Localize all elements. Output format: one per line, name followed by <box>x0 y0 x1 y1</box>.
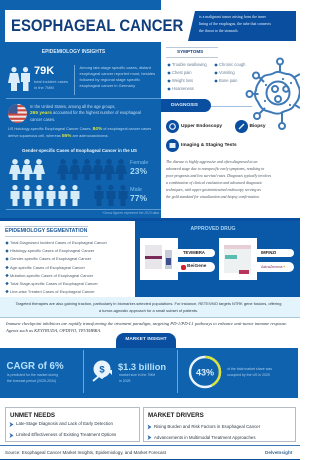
source text: Source: Esophageal Cancer Market Insights, Epidemiology, and Market Forecast <box>5 450 166 455</box>
caption: CAGR: the forecast period (2025-2034) <box>7 379 56 383</box>
text block: diagnosis description: The disease is highly aggressive and often diagnosed at an <box>166 160 257 164</box>
panel: epidemiology segmentation <box>0 221 135 297</box>
definition text: lining of the esophagus, the tube that connects <box>199 22 271 26</box>
pictogram: male 77% <box>10 185 128 206</box>
caption: 79K: in the 7MM <box>34 85 54 90</box>
icon: two people <box>8 67 30 91</box>
panel: market drivers <box>143 407 296 442</box>
caption: 43% <box>227 367 272 377</box>
symptoms list: Weight loss <box>172 78 193 83</box>
text block: among late-stage cases: esophageal cancer in Germany <box>80 83 135 88</box>
heading: diagnosis <box>161 99 211 112</box>
icon: imaging <box>166 139 179 152</box>
title box <box>5 10 186 42</box>
band: blue divider <box>0 218 300 221</box>
callout: targeted therapies: a tumor-agnostic approach for a small subset of patients. <box>99 308 198 312</box>
text block: diagnosis description <box>166 160 271 199</box>
list: unmet needs: Late-Stage Diagnosis and Lack of Early Detection <box>16 421 113 426</box>
callout: targeted therapies <box>0 297 300 318</box>
heading: epidemiology insights: EPIDEMIOLOGY INSIGHTS <box>42 49 105 55</box>
title: ESOPHAGEAL CANCER <box>11 16 183 35</box>
symptoms list: Bone pain <box>219 78 237 83</box>
segmentation list: Total Stage-specific Cases of Esophageal Cancer <box>10 280 98 286</box>
panel: market insight <box>0 348 298 398</box>
label: female 23%: 23% <box>130 166 147 176</box>
drug logo: AstraZeneca <box>257 262 294 272</box>
text block: immune checkpoint inhibitors: Immune checkpoint inhibitors are rapidly transforming the treatment paradigm, targeting PD-1/PD-L1 pathways to enhance anti-tumor immune response. <box>6 321 287 326</box>
donut chart: 43%: 43% <box>196 368 214 378</box>
label: female 23%: Female <box>130 160 148 166</box>
caption: 43%: occupied by the US in 2025 <box>227 373 270 377</box>
icon: US flag <box>8 104 27 123</box>
logo: DelveInsight: DelveInsight <box>265 450 292 454</box>
segmentation list: Total Diagnosed Incident Cases of Esophageal Cancer <box>10 240 107 245</box>
list: market drivers: Rising Burden and Risk Factors in Esophageal Cancer <box>154 424 260 429</box>
heading: approved drug: APPROVED DRUG <box>190 226 236 232</box>
text block: diagnosis description: a combination of clinical evaluation and advanced diagnostic <box>166 181 262 185</box>
text block: among late-stage cases: followed by regional stage specific <box>80 77 140 82</box>
icon: cancer cell <box>246 58 300 130</box>
list: unmet needs: Limited Effectiveness of Existing Treatment Options <box>16 432 116 437</box>
segmentation list <box>5 240 107 294</box>
drug label: IMFINZI <box>257 249 294 257</box>
symptoms list <box>168 62 246 91</box>
pictogram: female 23% <box>9 159 127 180</box>
label: male 77%: Male <box>130 187 142 193</box>
drug label: TEVIMBRA <box>178 249 215 257</box>
text block: US age groups: cancer cases. <box>30 117 55 122</box>
heading: unmet needs: UNMET NEEDS <box>10 412 55 418</box>
text block: diagnosis description: the gold standard for visualization and biopsy confirmation. <box>166 195 260 199</box>
text block: US age groups: 265 years accounted for the highest number of esophageal <box>30 110 141 116</box>
drug label: IMFINZI: IMFINZI <box>261 250 276 255</box>
text block: among late-stage cases: Among late-stage specific cases, distant <box>80 65 151 70</box>
caption: CAGR <box>7 373 58 383</box>
segmentation list: Age-specific Cases of Esophageal Cancer <box>10 264 85 270</box>
heading: market drivers: MARKET DRIVERS <box>148 412 204 418</box>
text block: histology: US histology-specific Esophageal Cancer Cases, 84% of esophageal cancer cases <box>8 127 151 132</box>
caption: 79K: total incident cases <box>34 79 68 84</box>
segmentation list: Gender-specific Cases of Esophageal Cancer <box>10 256 91 261</box>
heading: market insight: MARKET INSIGHT <box>125 337 167 342</box>
symptoms list: Hoarseness <box>172 86 194 91</box>
heading: diagnosis: DIAGNOSIS <box>171 103 198 108</box>
text block: diagnosis description: poor prognosis and low survival rates. Diagnosis typically involves <box>166 174 271 178</box>
product image: Imfinzi <box>219 238 257 280</box>
text block: US age groups <box>30 104 141 122</box>
text block: histology: derive squamous cell, whereas 55% are adenocarcinoma. <box>8 134 109 139</box>
symptoms list: Chest pain <box>172 70 192 75</box>
caption: market value: in 2025 <box>119 379 130 383</box>
label: female 23% <box>130 160 148 176</box>
diagnosis: upper endoscopy: Upper Endoscopy <box>181 124 222 128</box>
definition text: is a malignant tumor arising from the inner <box>199 15 266 19</box>
heading: epidemiology segmentation: EPIDEMIOLOGY SEGMENTATION <box>5 228 87 234</box>
stat: market value: $1.3 billion <box>118 362 166 372</box>
definition text: the throat to the stomach. <box>199 29 238 33</box>
text block: histology <box>8 127 151 139</box>
icon: dollar growth: $ <box>99 364 105 376</box>
text block: immune checkpoint inhibitors <box>6 321 288 333</box>
list: unmet needs <box>10 421 116 438</box>
panel: epidemiology insights <box>0 0 161 222</box>
text block: among late-stage cases <box>80 65 155 88</box>
label: male 77% <box>130 187 147 203</box>
definition box <box>188 11 296 41</box>
label: male 77%: 77% <box>130 193 147 203</box>
source bar <box>0 445 300 460</box>
symptoms list: Vomiting <box>219 70 235 75</box>
list: market drivers <box>148 424 260 440</box>
footnote: *Gross figures represent the 2023 data <box>102 211 159 215</box>
segmentation list: Mutation-specific Cases of Esophageal Cancer <box>10 272 93 278</box>
diagnosis: biopsy: Biopsy <box>250 124 266 128</box>
drug logo: AstraZeneca: AstraZeneca✦ <box>261 265 286 269</box>
diagnosis: biopsy <box>235 120 266 133</box>
diagnosis: imaging and staging tests: Imaging & Staging Tests <box>181 142 237 148</box>
diagnosis: imaging and staging tests <box>166 139 237 152</box>
icon: biopsy <box>235 120 248 133</box>
heading: market insight <box>116 333 176 348</box>
diagnosis: upper endoscopy <box>166 120 222 133</box>
text block: diagnosis description: advanced stage due to nonspecific early symptoms, resulting in <box>166 167 264 171</box>
text block: US age groups: In the United States, among all the age groups, <box>30 104 116 109</box>
segmentation list: Line-wise Treated Cases of Esophageal Cancer <box>10 288 95 294</box>
heading: symptoms: SYMPTOMS <box>177 49 203 54</box>
stat: CAGR: CAGR of 6% <box>6 361 64 372</box>
drug logo: BeiGene <box>178 262 215 272</box>
donut chart: 43% <box>188 356 222 388</box>
symptoms list: Trouble swallowing <box>172 62 207 67</box>
product image: Tevimbra <box>140 238 178 280</box>
drug label: TEVIMBRA: TEVIMBRA <box>183 250 205 255</box>
caption: 79K <box>34 79 68 90</box>
list: market drivers: Advancements in Multimodal Treatment Approaches <box>154 434 256 440</box>
callout: targeted therapies: Targeted therapies are also gaining traction, particularly in biomarker-selected populations. For instance, RETEVMO targets NTRK gene fusions, offering <box>16 300 281 306</box>
icon: dollar growth <box>92 360 112 382</box>
definition text <box>199 15 271 32</box>
text block: immune checkpoint inhibitors: Agents such as KEYTRUDA, OPDIVO, TEVIMBRA. <box>6 328 101 333</box>
text block: diagnosis description: techniques, with upper gastrointestinal endoscopy serving as <box>166 188 261 192</box>
stat: 79K: 79K <box>34 65 54 77</box>
caption: market value: market size in the 7MM <box>119 373 155 377</box>
text block: among late-stage cases: esophageal cancer reported most, besides <box>80 71 155 76</box>
drug logo: BeiGene: BeiGene <box>187 264 206 269</box>
chart heading: gender-specific cases: Gender-specific Cases of Esophageal Cancer in the US <box>22 148 137 152</box>
icon: endoscopy <box>166 120 179 133</box>
symptoms list: Chronic cough <box>219 62 245 67</box>
caption: market value <box>119 373 155 383</box>
panel: unmet needs <box>5 407 140 442</box>
panel: approved drug <box>135 221 300 297</box>
caption: 43%: of the total market share was <box>227 367 272 371</box>
segmentation list: Histology-specific Cases of Esophageal Cancer <box>10 248 94 253</box>
caption: CAGR: is predicted for the market during <box>7 373 58 377</box>
